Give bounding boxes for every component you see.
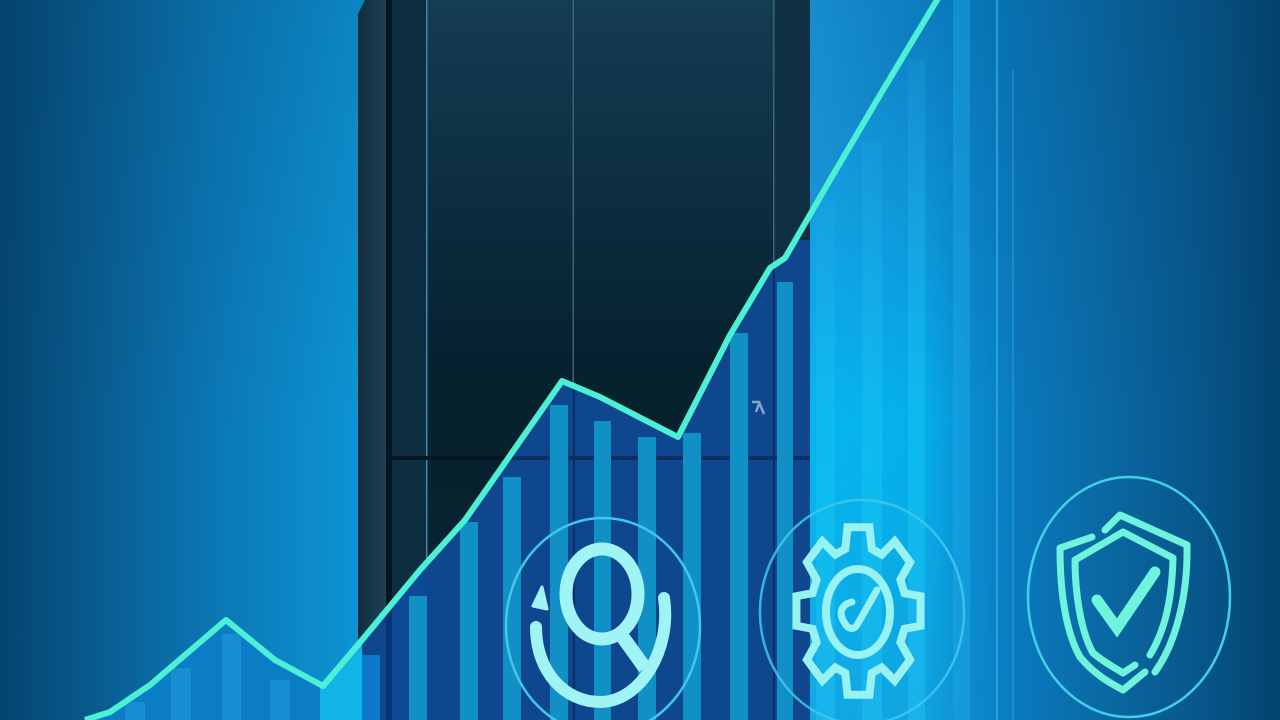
server cabinet <box>358 0 810 720</box>
bar chart: central bars <box>409 282 793 720</box>
trend line <box>85 0 940 720</box>
icon: magnifier in circle <box>506 518 700 720</box>
icon: shield with check in circle <box>1028 477 1230 717</box>
chart area fill under line <box>85 0 1015 720</box>
bar chart: bright right bars <box>816 0 1014 720</box>
icon: gear with check in circle <box>760 500 964 720</box>
small artifact near chart <box>752 402 764 414</box>
bar chart: left faint bars <box>125 634 290 720</box>
